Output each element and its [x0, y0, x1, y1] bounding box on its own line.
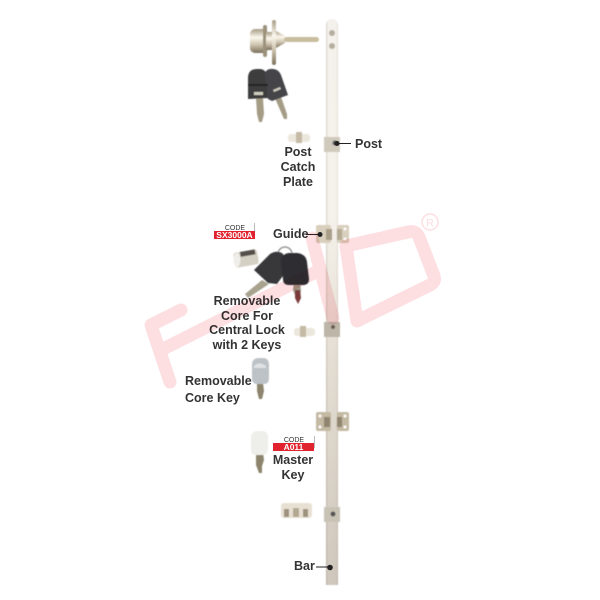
label: Removable Core For Central Lock with 2 Keys: with 2 Keys: [212, 338, 281, 352]
label: Removable Core Key: Removable: [185, 374, 252, 388]
code tag SX3000A: SX3000A: [216, 230, 253, 240]
post bracket: [324, 137, 340, 152]
icon: black keys with ring: [245, 247, 309, 304]
guide middle: [316, 412, 349, 431]
icon: white master key: [251, 431, 268, 473]
post catch plate 3: [281, 503, 312, 518]
code tag A011: [273, 436, 314, 452]
code tag A011: A011: [284, 442, 304, 452]
bar: [326, 19, 338, 585]
label: Post Catch Plate: Plate: [283, 175, 313, 189]
post bracket 3: [324, 507, 340, 522]
label: Removable Core For Central Lock with 2 Keys: Core For: [221, 309, 273, 323]
label: Removable Core Key: Core Key: [185, 391, 240, 405]
label: Post: Post: [355, 137, 383, 151]
label: Master Key: Master: [273, 453, 313, 467]
label: Post Catch Plate: [281, 145, 315, 189]
label: Removable Core For Central Lock with 2 Keys: [209, 294, 285, 352]
label: Post: [334, 137, 383, 151]
label: Removable Core Key: [185, 374, 252, 405]
label: Post Catch Plate: Post: [284, 145, 312, 159]
label: Removable Core For Central Lock with 2 Keys: Removable: [214, 294, 280, 308]
label: Master Key: [273, 453, 313, 482]
label: Bar: [294, 559, 333, 573]
post catch plate 2: [294, 326, 315, 337]
code tag A011: CODE: [284, 437, 304, 444]
guide top: [316, 225, 349, 243]
icon: grey removable core key: [252, 358, 269, 399]
post bracket 2: [324, 322, 340, 337]
post catch plate 1: [288, 132, 310, 143]
icon: black keys pair: [248, 69, 288, 122]
label: Post Catch Plate: Catch: [281, 160, 315, 174]
watermark: FHD logo: [151, 214, 438, 382]
label: Bar: Bar: [294, 559, 315, 573]
code tag SX3000A: CODE: [225, 225, 245, 232]
icon: cam lock: [250, 20, 319, 65]
label: Removable Core For Central Lock with 2 Keys: Central Lock: [209, 323, 285, 337]
watermark: FHD logo: R: [426, 218, 434, 230]
label: Master Key: Key: [282, 468, 305, 482]
code tag SX3000A: [214, 223, 255, 240]
icon: removable core cylinder: [233, 249, 259, 268]
label: Guide: Guide: [273, 227, 308, 241]
